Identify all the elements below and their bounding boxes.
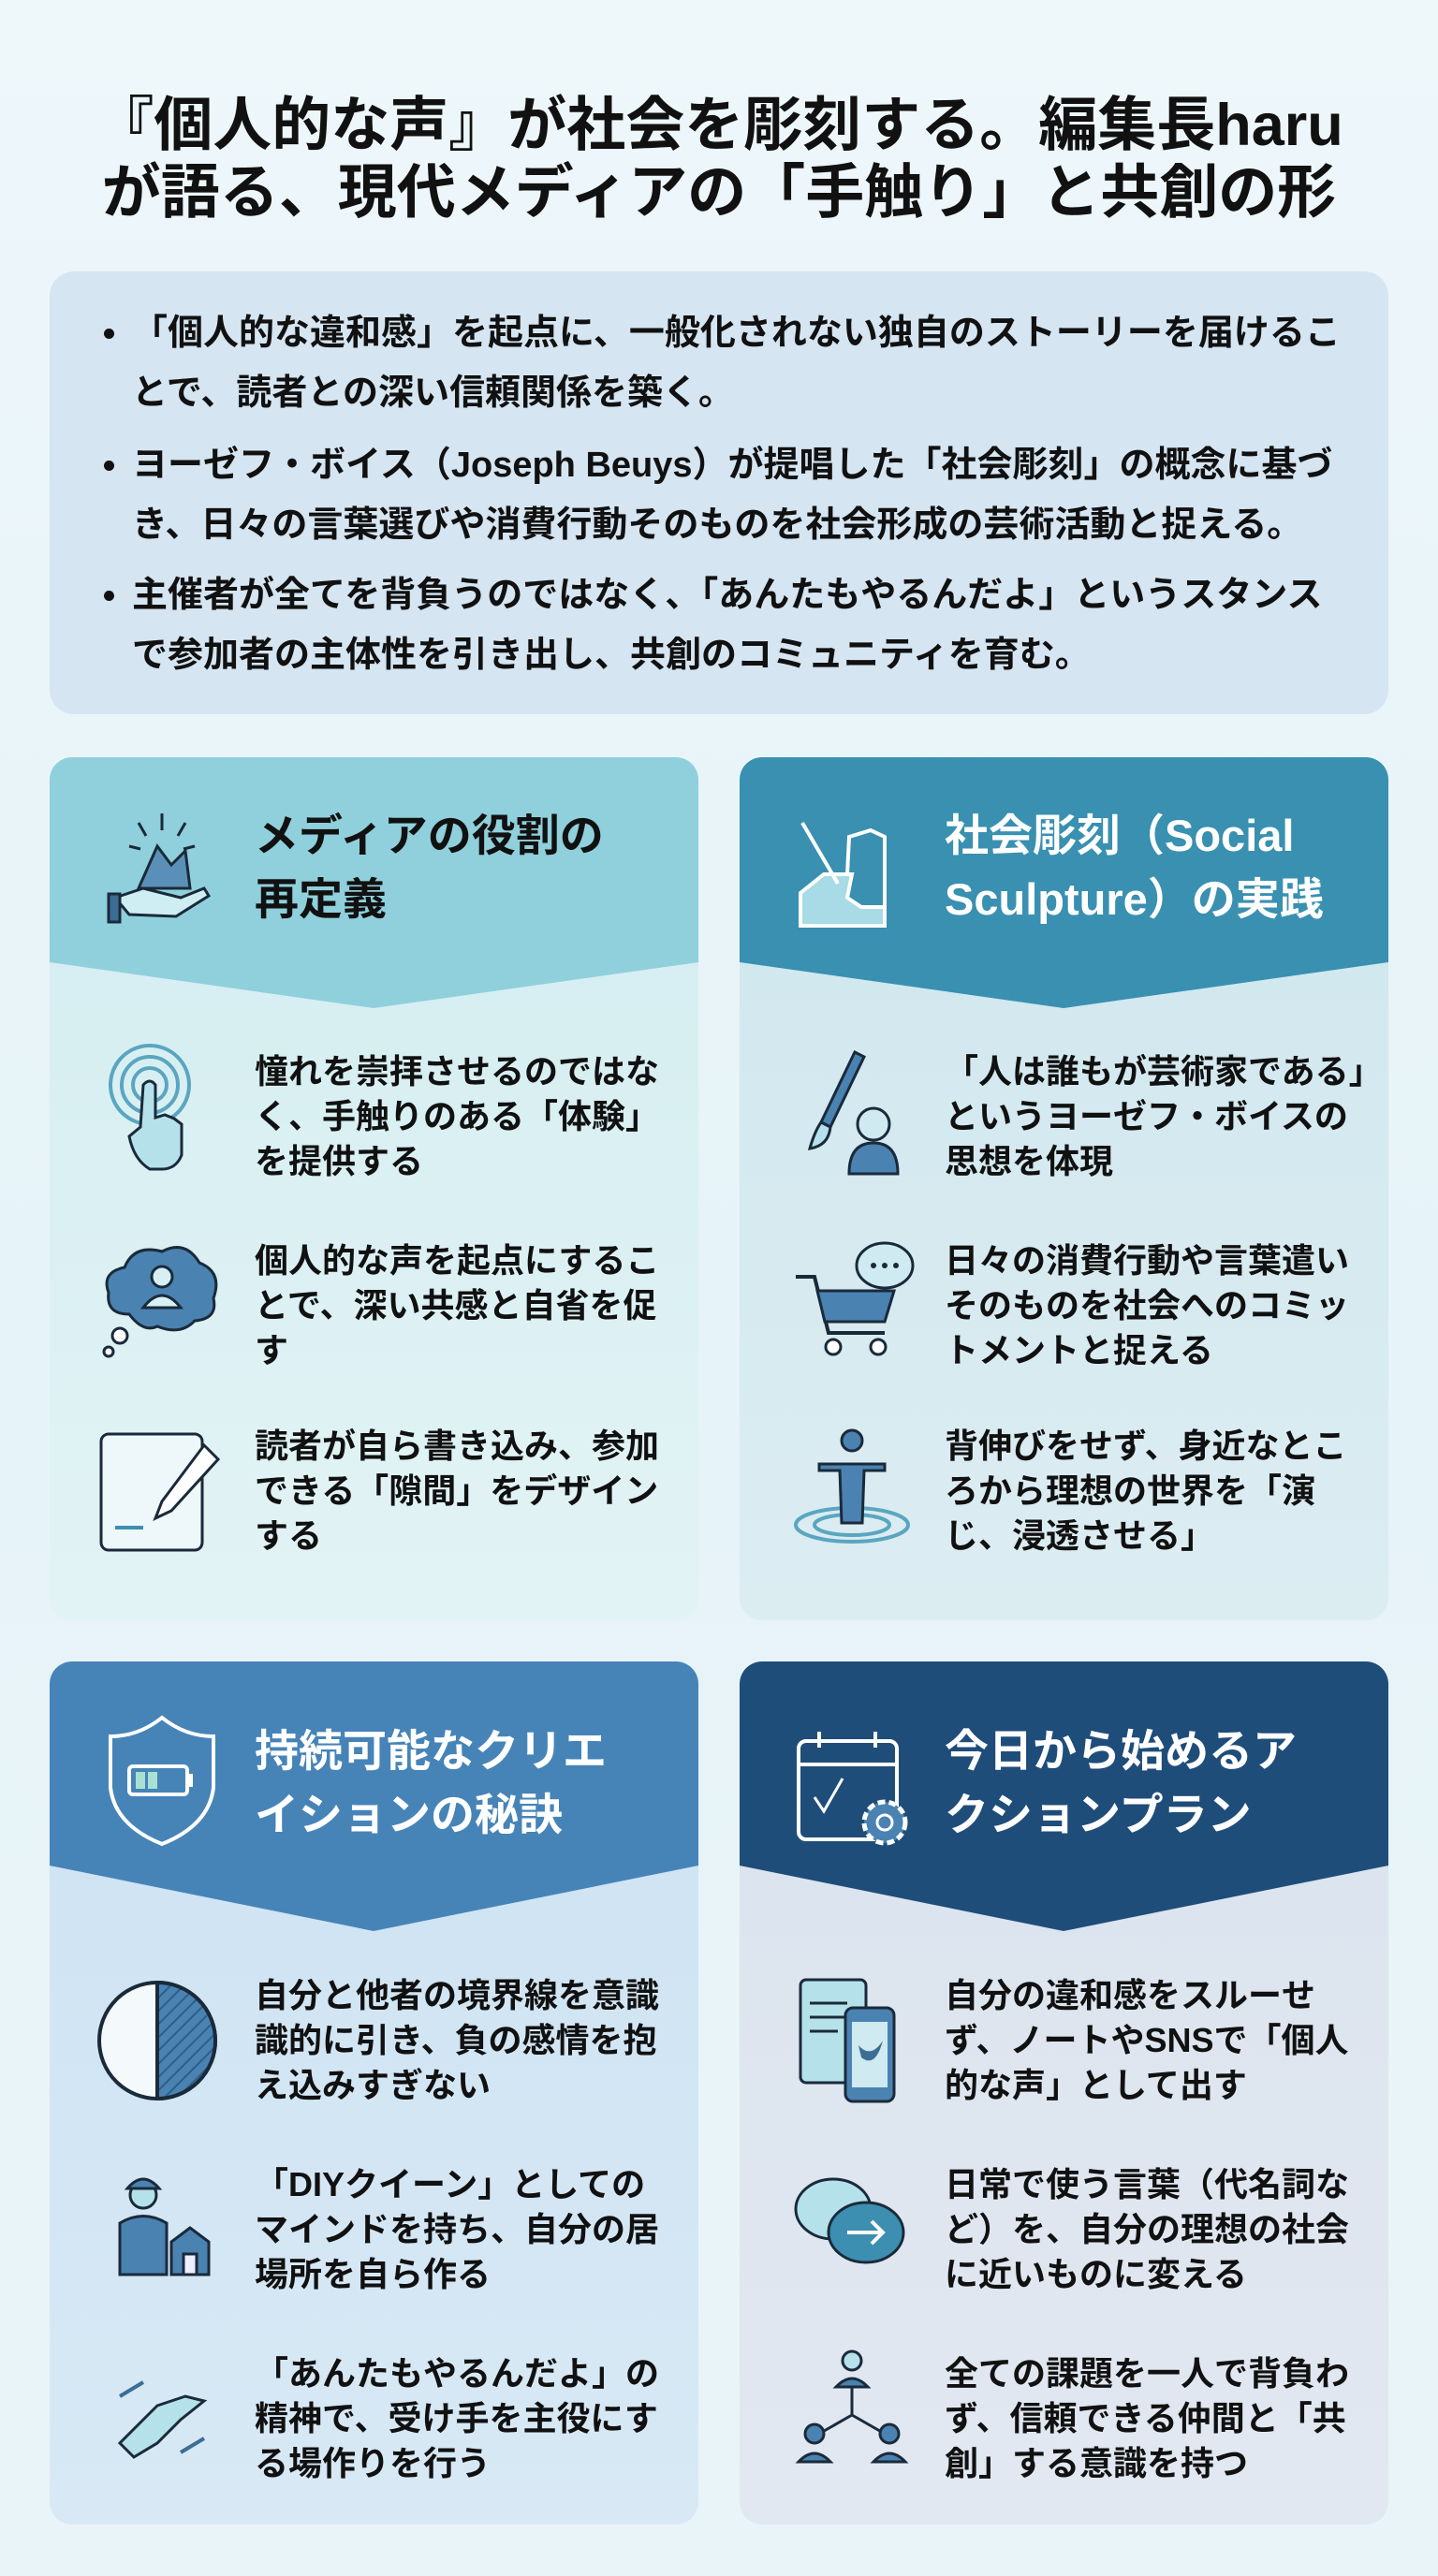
item 3: ろから理想の世界を「演 [945,1471,1315,1510]
item 3 [945,1427,1346,1555]
item 3 [255,2354,659,2482]
item 3: ず、信頼できる仲間と「共 [945,2399,1346,2437]
item 1: 自分の違和感をスルーせ [945,1976,1315,2014]
heading: イションの秘訣 [255,1790,563,1839]
item 1: 思想を体現 [945,1142,1113,1180]
icon: calendar gear [797,1732,908,1846]
header [740,1661,1388,1931]
item 3: る場作りを行う [255,2444,491,2482]
item 1: を提供する [255,1142,423,1180]
bullet 1: 「個人的な違和感」を起点に、一般化されない独自のストーリーを届けるこ [132,314,1341,353]
item 2 [255,2165,659,2293]
panel: media role [50,757,698,1620]
bullet 2: き、日々の言葉選びや消費行動そのものを社会形成の芸術活動と捉える。 [132,505,1302,545]
title [95,93,1343,226]
icon: cart and chat [796,1241,914,1355]
item 3: できる「隙間」をデザイン [255,1471,658,1510]
item 3: 背伸びをせず、身近なとこ [945,1427,1346,1465]
bullet 2 [132,435,1333,555]
item 2 [255,1241,659,1369]
item 2: 日々の消費行動や言葉遣い [945,1241,1349,1280]
heading: クションプラン [945,1790,1252,1839]
icon: chat arrow [794,2177,904,2263]
icon: chisel and sculpture [799,822,887,928]
icon: brush and person [808,1050,899,1176]
item 1: え込みすぎない [255,2066,491,2104]
title: 『個人的な声』が社会を彫刻する。編集長haru [95,93,1343,158]
item 3 [945,2354,1349,2482]
item 3 [255,1427,659,1555]
heading [945,1726,1297,1839]
panel: action plan [740,1661,1388,2525]
bullet 1: とで、読者との深い信頼関係を築く。 [132,373,734,413]
bullet 3: で参加者の主体性を引き出し、共創のコミュニティを育む。 [132,636,1091,675]
panel: sustainable creation [50,1661,698,2525]
bullet 3 [132,565,1322,685]
item 2: そのものを社会へのコミッ [945,1286,1349,1325]
item 1 [255,1052,659,1180]
heading: 社会彫刻（Social [945,811,1294,860]
summary box [50,271,1388,714]
icon: person in ripples [794,1428,910,1544]
item 3: 全ての課題を一人で背負わ [945,2354,1349,2393]
item 3: じ、浸透させる」 [945,1516,1214,1555]
heading: 持続可能なクリエ [255,1726,607,1776]
header [740,757,1388,1008]
icon: builder [118,2177,210,2276]
panel: social sculpture [740,757,1388,1620]
item 1: 識的に引き、負の感情を抱 [255,2021,656,2059]
bullet 3: 主催者が全てを背負うのではなく、「あんたもやるんだよ」というスタンス [132,576,1322,615]
header [50,1661,698,1931]
item 2: 個人的な声を起点にするこ [255,1241,659,1280]
icon: shield battery [109,1715,215,1846]
heading [255,1726,607,1839]
bullet 2: ヨーゼフ・ボイス（Joseph Beuys）が提唱した「社会彫刻」の概念に基づ [132,446,1333,485]
icon: hand with mountain [107,813,211,923]
heading: 今日から始めるア [945,1726,1297,1776]
header [50,757,698,1008]
item 1: く、手触りのある「体験」 [255,1097,659,1135]
item 2: マインドを持ち、自分の居 [255,2210,659,2248]
item 2: に近いものに変える [945,2255,1247,2293]
item 2: 場所を自ら作る [255,2255,491,2293]
item 3: 「あんたもやるんだよ」の [255,2354,659,2393]
item 3: 読者が自ら書き込み、参加 [255,1427,659,1465]
icon: hands passing [118,2380,208,2459]
item 3: する [255,1516,322,1555]
item 2: 「DIYクイーン」としての [255,2165,645,2203]
item 3: 精神で、受け手を主役にす [255,2399,658,2437]
heading: メディアの役割の [255,811,604,860]
item 1: 「人は誰もが芸術家である」 [945,1052,1383,1090]
icon: network people [796,2349,908,2464]
item 2 [945,2165,1349,2293]
heading: 再定義 [255,874,387,924]
item 2: ど）を、自分の理想の社会 [945,2210,1349,2248]
heading [945,811,1324,924]
icon: note and pen [99,1432,220,1552]
heading: Sculpture）の実践 [945,874,1324,924]
heading [255,811,604,924]
item 1: 自分と他者の境界線を意識 [255,1976,659,2014]
item 1: ず、ノートやSNSで「個人 [945,2021,1349,2059]
item 2: トメントと捉える [945,1331,1213,1369]
item 2: す [255,1331,288,1369]
item 2: 日常で使う言葉（代名詞な [945,2165,1349,2203]
item 1 [945,1976,1349,2104]
item 1: 的な声」として出す [945,2066,1247,2104]
icon: notebook and phone [800,1979,895,2102]
item 1: というヨーゼフ・ボイスの [945,1097,1348,1135]
item 1 [255,1976,659,2104]
icon: half circle [97,1981,217,2100]
icon: thought cloud [103,1246,217,1357]
title: が語る、現代メディアの「手触り」と共創の形 [102,160,1336,226]
item 3: 創」する意識を持つ [945,2444,1248,2482]
item 2 [945,1241,1349,1369]
item 1: 憧れを崇拝させるのではな [255,1052,659,1090]
icon: touch [109,1044,191,1170]
item 1 [945,1052,1383,1180]
item 2: とで、深い共感と自省を促 [255,1286,656,1325]
bullet 1 [132,303,1341,423]
